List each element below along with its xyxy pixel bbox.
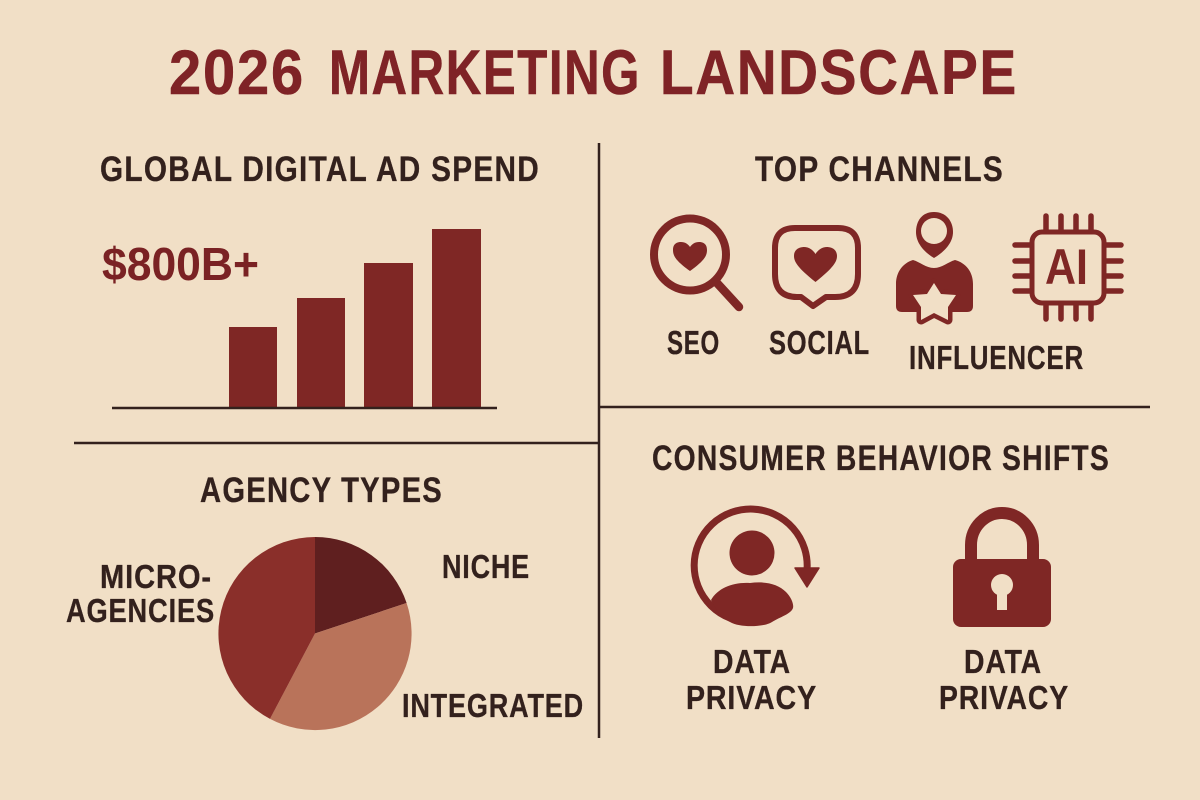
stat: $800B+: $800B+ <box>102 238 259 290</box>
label: data privacy left: PRIVACY <box>686 679 817 716</box>
icon: padlock <box>953 513 1051 627</box>
icon: ai chip <box>1015 216 1121 319</box>
label: data privacy right <box>939 643 1069 716</box>
icon: person with circular arrow <box>694 509 819 626</box>
title: LANDSCAPE <box>660 38 1018 108</box>
title: 2026 <box>169 38 305 108</box>
label: micro-agencies: AGENCIES <box>66 592 215 629</box>
label: data privacy right: PRIVACY <box>939 679 1069 716</box>
label: data privacy left <box>686 643 817 716</box>
panel: top channels <box>654 150 1121 376</box>
label: social: SOCIAL <box>769 324 870 361</box>
icon: seo magnifier <box>654 218 739 307</box>
heading: global digital ad spend: GLOBAL DIGITAL AD SPEND <box>100 150 540 189</box>
label: micro-agencies <box>66 558 215 629</box>
label: data privacy left: DATA <box>713 643 791 680</box>
bar chart <box>112 229 497 408</box>
pie chart <box>218 537 412 730</box>
heading: agency types: AGENCY TYPES <box>200 471 443 510</box>
panel: agency types <box>66 471 584 730</box>
label: micro-agencies: MICRO- <box>100 558 212 595</box>
label: data privacy right: DATA <box>964 643 1042 680</box>
panel: global digital ad spend <box>100 150 540 408</box>
title: MARKETING <box>329 38 641 108</box>
icon: ai chip: AI <box>1045 239 1088 295</box>
heading: top channels: TOP CHANNELS <box>755 150 1004 189</box>
label: seo: SEO <box>667 324 720 361</box>
icon: influencer with star <box>896 212 973 320</box>
label: influencer: INFLUENCER <box>909 339 1084 376</box>
panel: consumer behavior shifts <box>652 439 1110 716</box>
label: integrated: INTEGRATED <box>402 687 584 724</box>
label: niche: NICHE <box>442 548 530 585</box>
icon: social speech bubble <box>775 228 858 306</box>
